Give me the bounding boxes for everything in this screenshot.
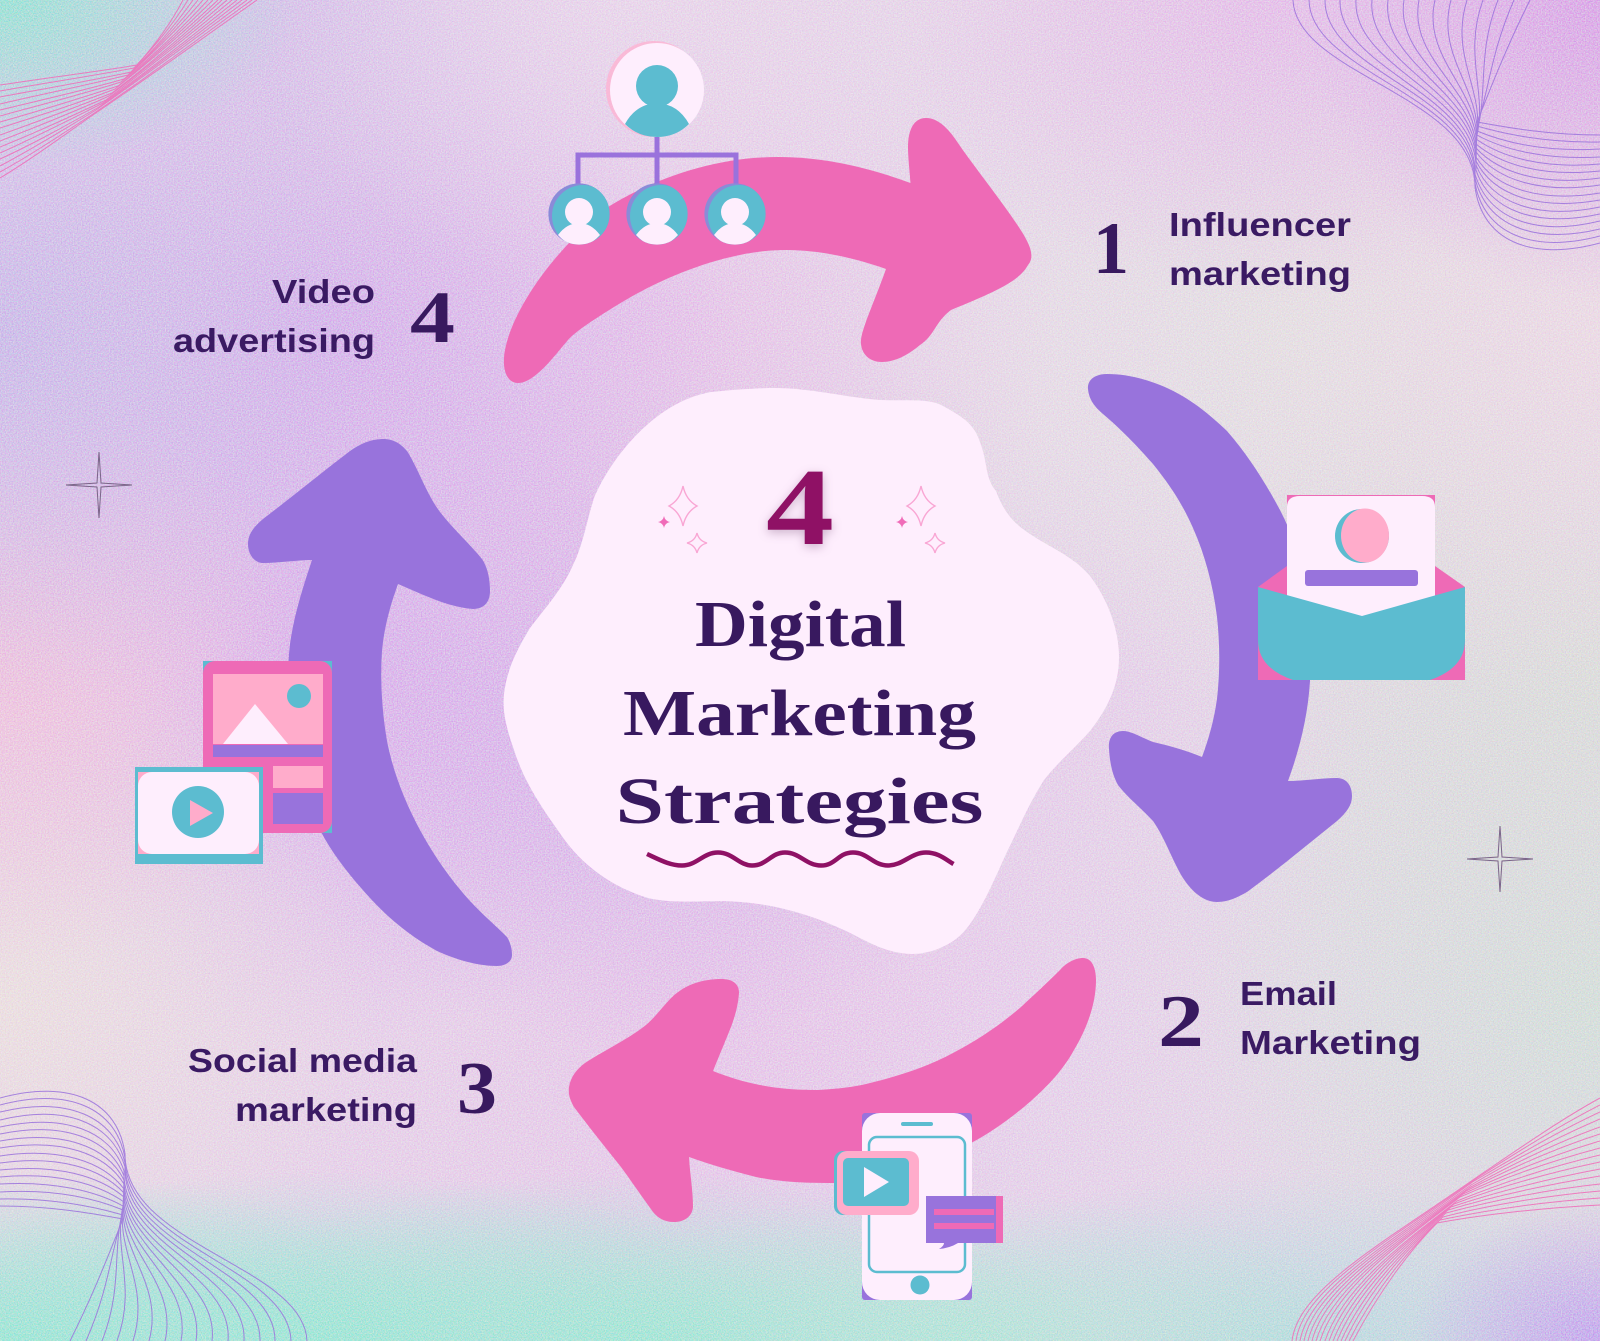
title [616, 588, 984, 838]
title number: 4 [766, 446, 834, 568]
label: strategy 3: 3 [457, 1048, 497, 1130]
label: strategy 1: Influencer [1169, 206, 1351, 243]
arrow: left purple [248, 439, 512, 966]
decoration: right four-point star [1467, 826, 1533, 892]
icon: phone with video and chat [834, 1113, 1003, 1300]
label: strategy 4: advertising [173, 322, 375, 359]
title: Marketing [623, 677, 976, 750]
label: strategy 4: 4 [410, 277, 455, 359]
label: strategy 3: Social media [188, 1042, 418, 1079]
decoration: left four-point star [66, 452, 132, 518]
title underline wave [647, 852, 954, 866]
label: strategy 2 [1158, 975, 1421, 1063]
label: strategy 1: 1 [1093, 208, 1129, 290]
icon: email envelope [1258, 495, 1465, 680]
decoration: top-right purple line wave [1293, 0, 1600, 250]
label: strategy 4: Video [272, 273, 375, 310]
label: strategy 3 [188, 1042, 497, 1130]
arrow: right purple [1088, 374, 1352, 902]
label: strategy 1: marketing [1169, 255, 1351, 292]
title: Digital [695, 588, 906, 661]
label: strategy 1 [1093, 206, 1351, 292]
label: strategy 3: marketing [235, 1091, 417, 1128]
icon: image and video cards [135, 661, 332, 864]
label: strategy 2: Email [1240, 975, 1337, 1012]
icon: influencer org chart [548, 41, 770, 247]
label: strategy 2: Marketing [1240, 1024, 1421, 1061]
decoration: bottom-left purple line wave [0, 1091, 307, 1341]
label: strategy 2: 2 [1158, 981, 1204, 1063]
panel: central blob [504, 388, 1119, 954]
title: Strategies [616, 765, 984, 838]
icon: right sparkles [896, 486, 945, 553]
icon: left sparkles [658, 486, 707, 553]
decoration: top-left pink line wave [0, 0, 257, 178]
arrow: top pink [504, 118, 1031, 383]
label: strategy 4 [173, 273, 455, 359]
arrow: bottom pink [569, 958, 1096, 1222]
decoration: bottom-right pink line wave [1292, 1098, 1600, 1341]
